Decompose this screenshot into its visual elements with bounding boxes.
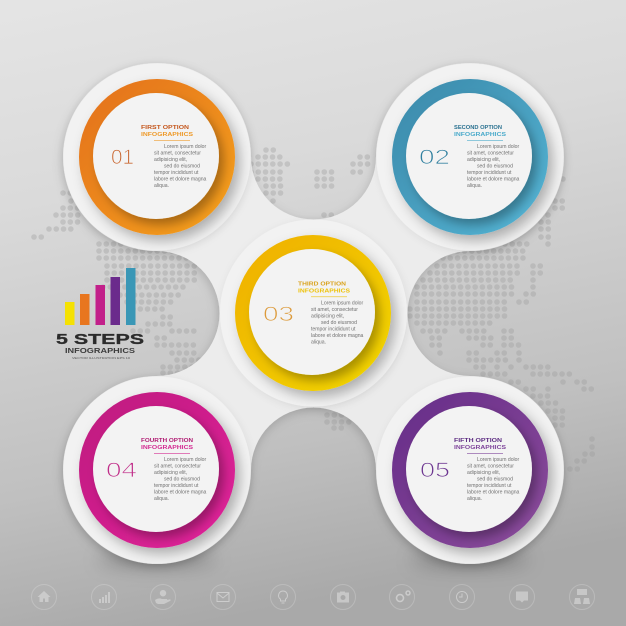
icon: clock [457, 592, 468, 603]
heading: THIRD OPTION [298, 282, 346, 288]
icon: network [574, 589, 590, 604]
heading: INFOGRAPHICS [298, 288, 350, 294]
body text: sit amet, consectetur [467, 150, 514, 156]
body text: aliqua. [311, 340, 326, 346]
body text: sit amet, consectetur [311, 307, 358, 313]
body text: labore et dolore magna [154, 490, 207, 496]
bottom shadows [97, 551, 530, 569]
body text: sed do eiusmod [477, 476, 513, 482]
number: 05 [420, 459, 450, 482]
body text: adipisicing elit, [467, 470, 500, 476]
ring [235, 235, 391, 391]
body text: sed do eiusmod [164, 476, 200, 482]
logo bar chart [65, 268, 136, 325]
ring [392, 392, 548, 548]
connected white blob [63, 63, 564, 564]
icon row [32, 584, 594, 610]
heading: FIRST OPTION [141, 125, 189, 131]
body text: tempor incididunt ut [467, 170, 512, 176]
icon: hand with coin [155, 590, 171, 604]
ring [392, 79, 548, 235]
logo title: 5 STEPS [56, 331, 144, 348]
logo: 5 steps [56, 268, 144, 360]
body text: aliqua. [154, 496, 169, 502]
body text: adipisicing elit, [154, 470, 187, 476]
body text: aliqua. [467, 183, 482, 189]
body text: labore et dolore magna [467, 490, 520, 496]
body text: adipisicing elit, [467, 157, 500, 163]
dotted world map [34, 150, 593, 469]
body text: sit amet, consectetur [467, 464, 514, 470]
inner disc [249, 249, 375, 375]
ring [79, 79, 235, 235]
inner disc [93, 93, 219, 219]
body text [154, 457, 207, 502]
icon: camera [337, 592, 349, 602]
logo small print: VECTOR ILLUSTRATION EPS 10 [72, 356, 131, 360]
heading [454, 438, 506, 451]
panel: first option [79, 79, 235, 235]
body text [467, 144, 520, 189]
heading [141, 438, 193, 451]
number: 02 [419, 146, 450, 169]
icon: bar chart [99, 592, 110, 603]
body text: tempor incididunt ut [154, 483, 199, 489]
body text: Lorem ipsum dolor [477, 144, 519, 150]
inner disc [93, 406, 219, 532]
panel: second option [392, 79, 548, 235]
body text: labore et dolore magna [311, 333, 364, 339]
body text: Lorem ipsum dolor [321, 300, 363, 306]
body text: sed do eiusmod [164, 164, 200, 170]
heading: INFOGRAPHICS [454, 132, 506, 138]
blob highlight discs [64, 64, 564, 564]
heading: INFOGRAPHICS [141, 132, 193, 138]
heading: FOURTH OPTION [141, 438, 193, 444]
body text: labore et dolore magna [154, 176, 207, 182]
body text: sed do eiusmod [477, 164, 513, 170]
body text: aliqua. [154, 183, 169, 189]
icon: gears [397, 591, 410, 602]
number: 04 [106, 459, 137, 482]
heading [298, 282, 350, 294]
logo subtitle: INFOGRAPHICS [65, 348, 135, 355]
body text: Lorem ipsum dolor [477, 457, 519, 463]
body text: tempor incididunt ut [467, 483, 512, 489]
icon: home [38, 591, 50, 602]
number: 03 [263, 303, 294, 326]
icon: envelope [217, 592, 229, 602]
number: 01 [111, 146, 134, 169]
panel: third option [235, 235, 391, 391]
icon: speech bubble [516, 592, 528, 602]
heading [141, 125, 193, 138]
panel: fifth option [392, 392, 548, 548]
body text: tempor incididunt ut [311, 326, 356, 332]
body text: tempor incididunt ut [154, 170, 199, 176]
body text: sit amet, consectetur [154, 150, 201, 156]
heading: SECOND OPTION [454, 125, 502, 131]
body text [311, 300, 364, 346]
body text: aliqua. [467, 496, 482, 502]
heading: FIFTH OPTION [454, 438, 502, 444]
icon: light bulb [279, 591, 287, 603]
body text: sed do eiusmod [321, 320, 357, 326]
body text: sit amet, consectetur [154, 464, 201, 470]
body text: labore et dolore magna [467, 176, 520, 182]
heading: INFOGRAPHICS [141, 445, 193, 451]
inner disc [406, 93, 532, 219]
body text [154, 144, 207, 189]
heading: INFOGRAPHICS [454, 445, 506, 451]
panel: fourth option [79, 392, 235, 548]
body text: adipisicing elit, [154, 157, 187, 163]
body text [467, 457, 520, 502]
ring [79, 392, 235, 548]
heading [454, 125, 506, 138]
body text: adipisicing elit, [311, 314, 344, 320]
body text: Lorem ipsum dolor [164, 457, 206, 463]
body text: Lorem ipsum dolor [164, 144, 206, 150]
inner disc [406, 406, 532, 532]
